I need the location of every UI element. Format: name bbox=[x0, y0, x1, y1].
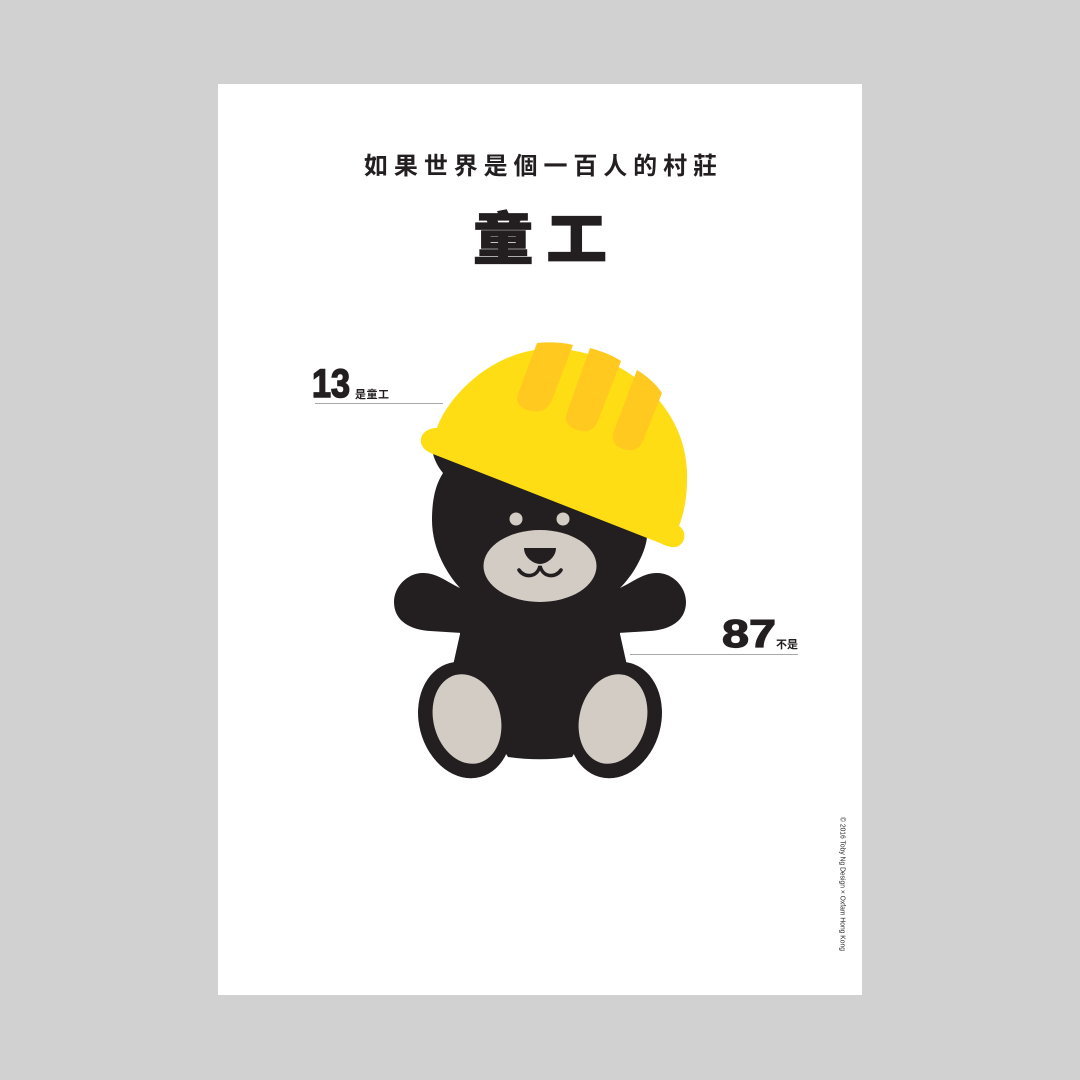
credit line: © 2016 Toby Ng Design × Oxfam Hong Kong bbox=[838, 817, 848, 951]
bear torso bbox=[452, 588, 628, 759]
callout: 87 are not bbox=[630, 613, 798, 656]
bear head bbox=[432, 454, 660, 588]
hard hat ridge 1 bbox=[517, 342, 573, 412]
label: 不是: 不是 bbox=[776, 638, 798, 651]
bear left eye bbox=[510, 512, 522, 526]
hard hat ridge 3 bbox=[613, 370, 662, 450]
callout: 13 are child labourers bbox=[312, 362, 443, 406]
bear nose bbox=[524, 548, 556, 564]
bear right leg bbox=[555, 651, 675, 789]
bear left arm bbox=[394, 573, 480, 633]
hard hat bbox=[421, 342, 687, 547]
number 87: 87 bbox=[722, 613, 776, 656]
panel: white poster bbox=[218, 84, 862, 995]
title: village premise: 如果世界是個一百人的村莊 bbox=[364, 153, 717, 180]
bear body and head bbox=[394, 454, 686, 789]
bear mouth bbox=[519, 566, 561, 576]
bear right arm bbox=[600, 573, 686, 633]
bear left leg bbox=[405, 651, 525, 789]
bear face and foot pads bbox=[423, 512, 657, 772]
hard hat ridge 2 bbox=[566, 348, 621, 431]
leader line bbox=[630, 654, 798, 655]
hard hat dome and brim bbox=[421, 349, 687, 547]
bear right foot pad bbox=[569, 666, 657, 772]
label: 是童工: 是童工 bbox=[355, 387, 389, 401]
bear right eye bbox=[556, 512, 570, 526]
bear left foot pad bbox=[423, 666, 511, 772]
number 13: 13 bbox=[312, 362, 350, 406]
illustration: teddy bear wearing a hard hat bbox=[394, 342, 687, 789]
bear nose and mouth bbox=[519, 548, 561, 576]
bear muzzle bbox=[484, 530, 596, 602]
heading: child labour: 童工 bbox=[473, 209, 607, 271]
leader line bbox=[315, 403, 443, 404]
